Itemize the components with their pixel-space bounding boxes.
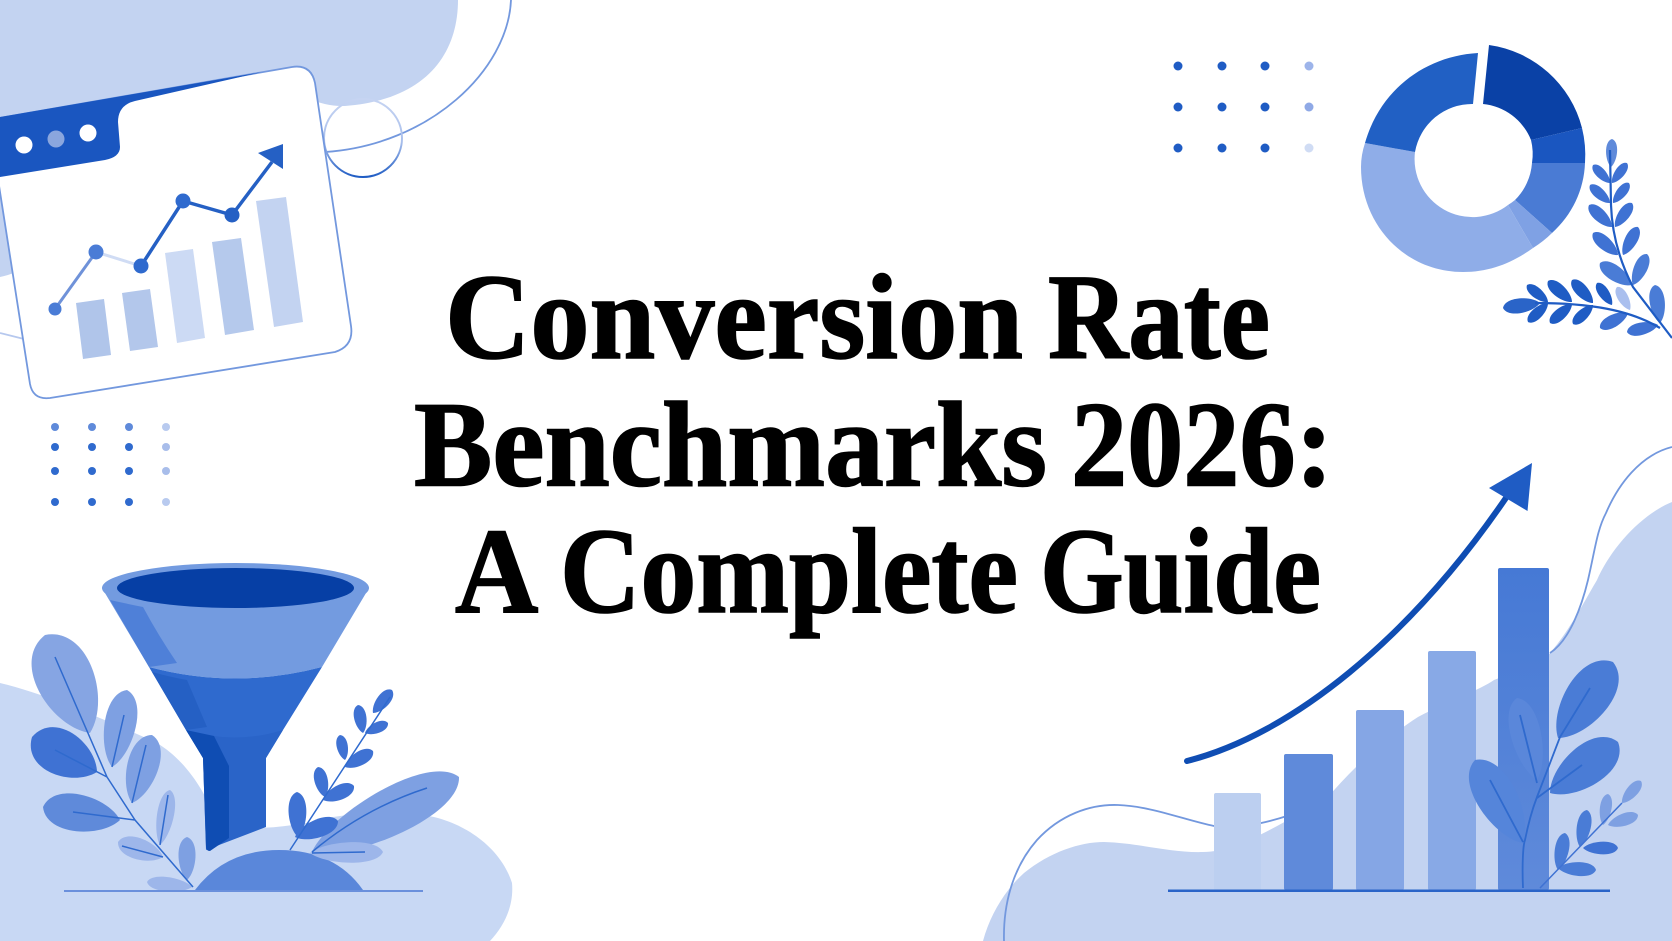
background blob: bottom left: [0, 683, 512, 941]
background blob: top left: [0, 0, 458, 277]
icon: funnel: [102, 563, 369, 851]
title: 2026:: [1071, 378, 1333, 512]
card trend line with arrow: [48, 144, 283, 316]
funnel top band shadow: [110, 600, 177, 667]
circle outline: [324, 99, 402, 177]
title: Complete: [560, 504, 1018, 639]
donut chart: [1361, 45, 1585, 272]
dot grid: top right: [1174, 62, 1314, 152]
funnel spout shadow: [186, 730, 229, 851]
curve: left stub: [0, 333, 24, 339]
curve: top left outline: [325, 0, 511, 152]
title: Rate: [1048, 250, 1270, 385]
card header tab: [0, 72, 262, 177]
funnel middle band shadow: [152, 672, 207, 730]
mound: [195, 850, 363, 890]
ground line: right: [1168, 890, 1610, 892]
funnel rim: [102, 563, 369, 613]
title: Guide: [1040, 504, 1321, 639]
bar chart: growth: [1214, 568, 1549, 890]
ground line: left: [64, 890, 423, 892]
curve: bottom left outline: [1004, 805, 1290, 941]
curve: right outline: [1550, 447, 1672, 653]
funnel lower band: [186, 730, 283, 850]
title: Benchmarks: [414, 378, 1047, 512]
title: Conversion: [445, 250, 1023, 385]
dot grid: left: [51, 423, 170, 506]
funnel opening: [117, 568, 354, 608]
funnel top band: [102, 588, 369, 678]
funnel middle band: [149, 667, 322, 758]
arrow: growth trend: [1187, 463, 1532, 761]
plant: right of funnel: [288, 686, 470, 873]
card body: [0, 67, 351, 398]
card bar chart: [76, 197, 303, 359]
background blob: bottom right: [983, 502, 1672, 941]
plant: left branch: [19, 623, 196, 894]
plant: bottom right small sprig: [1540, 777, 1645, 888]
panel: browser window chart card: [0, 67, 351, 398]
title: A: [455, 504, 538, 639]
plant: top right sprig: [1502, 139, 1672, 338]
plant: bottom right tall: [1458, 649, 1631, 888]
